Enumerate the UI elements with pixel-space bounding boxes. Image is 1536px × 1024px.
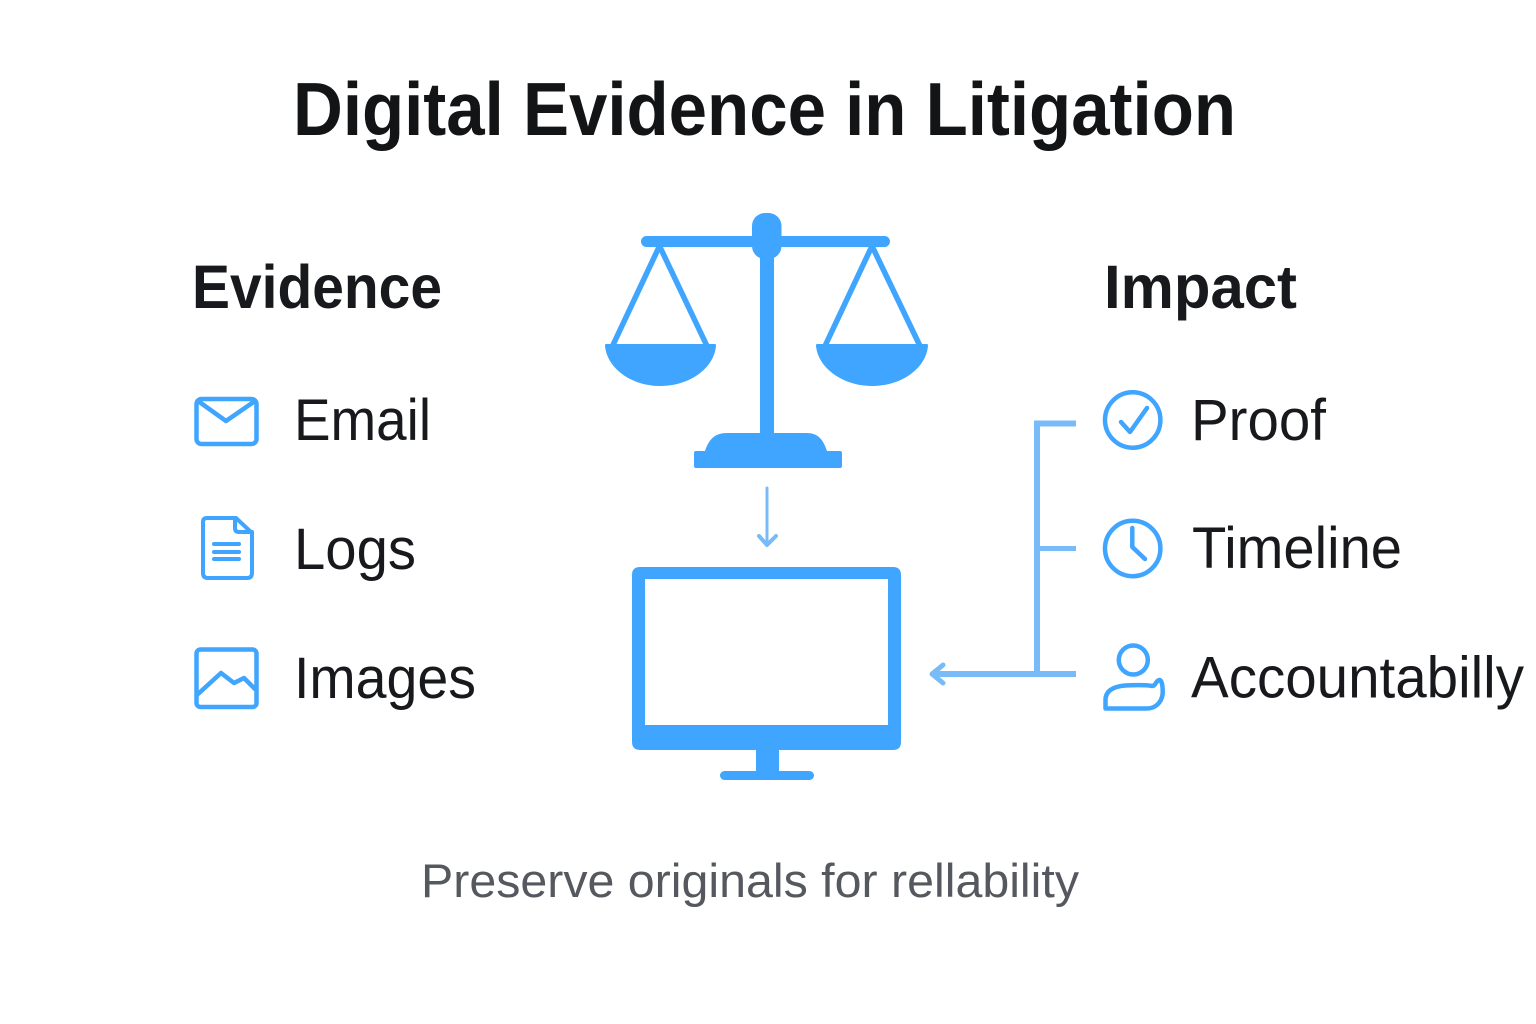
label: Timeline: Timeline [1192,516,1402,581]
icon: logs document [203,518,252,578]
title: Digital Evidence in Litigation [293,67,1236,151]
arrow: scales to monitor [759,488,776,545]
label: Images: Images [294,646,476,711]
caption: Preserve originals for rellability [421,855,1079,908]
label: Email: Email [294,388,431,453]
connector: impact bracket and arrow [932,421,1076,683]
right chains [825,246,920,346]
column [760,250,774,436]
label: Accountabilly: Accountabilly [1191,646,1524,710]
icon: image [196,650,256,707]
beam [641,236,890,247]
left pan [605,344,716,386]
label: Logs: Logs [294,517,416,582]
icon: monitor [632,567,901,780]
icon: email [196,399,256,444]
icon: accountability person [1106,646,1163,708]
icon: proof check [1105,392,1160,448]
base [694,433,842,468]
pivot [752,213,782,259]
icon: timeline clock [1105,521,1160,576]
left chains [612,246,707,346]
heading: Impact: Impact [1104,253,1297,321]
right pan [816,344,928,386]
label: Proof: Proof [1191,388,1327,453]
heading: Evidence: Evidence [192,253,442,321]
icon: scales of justice [605,213,928,468]
